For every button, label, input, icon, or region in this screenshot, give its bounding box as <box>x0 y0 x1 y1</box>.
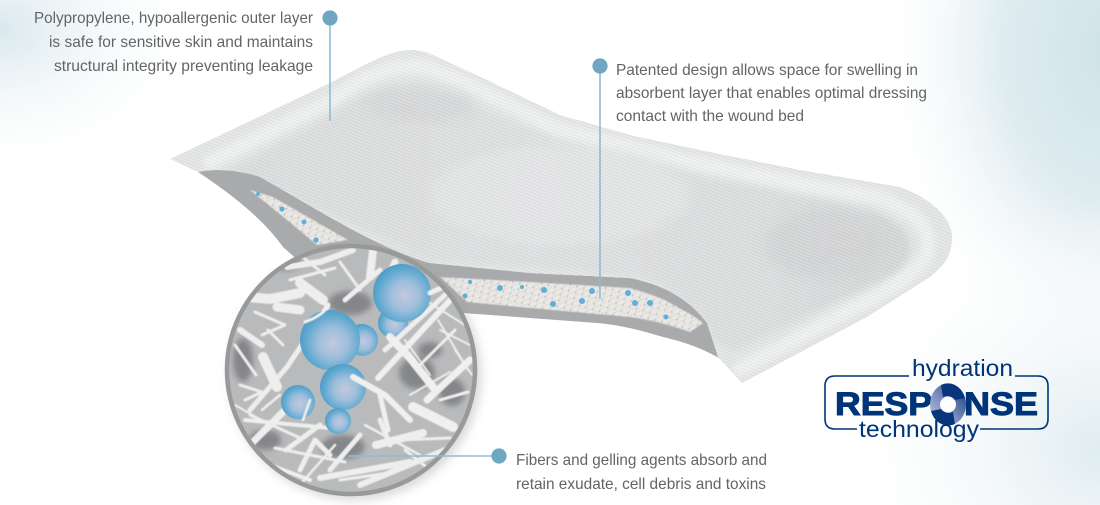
logo word: response <box>835 386 1038 422</box>
leader line <box>329 18 331 121</box>
logo word: response: RESP <box>835 386 932 422</box>
cross-section: absorbent foam right <box>440 277 703 332</box>
text block <box>516 452 767 493</box>
text block: structural integrity preventing leakage <box>54 58 313 75</box>
text block: retain exudate, cell debris and toxins <box>516 476 766 493</box>
logo word: technology: technology <box>859 416 980 442</box>
blue gel spheres, front <box>281 264 431 434</box>
dark gaps between fibers <box>233 254 465 459</box>
foreground fibers <box>303 288 470 430</box>
logo disc <box>930 383 966 426</box>
text block: is safe for sensitive skin and maintains <box>49 34 313 51</box>
white fibers <box>235 250 472 485</box>
logo: hydration response technology <box>825 355 1048 442</box>
text block: Patented design allows space for swelling in <box>616 62 918 79</box>
text block <box>616 62 927 125</box>
leader line <box>348 455 499 457</box>
text block: absorbent layer that enables optimal dressing <box>616 85 927 102</box>
marker dot <box>592 58 608 74</box>
text block: Fibers and gelling agents absorb and <box>516 452 767 469</box>
cross-section: absorbent foam left <box>250 190 348 245</box>
outer layer sheet <box>160 40 960 390</box>
logo word: hydration: hydration <box>912 355 1013 381</box>
callout: patented design <box>592 58 927 299</box>
cross-section: grey layers <box>198 170 719 358</box>
marker dot <box>322 10 338 26</box>
dressing illustration <box>160 40 960 390</box>
blue gel spheres, rear <box>356 314 408 356</box>
text block: Polypropylene, hypoallergenic outer layer <box>34 10 314 27</box>
marker dot <box>491 448 507 464</box>
logo word: response: O <box>936 386 960 422</box>
magnified fibers circle <box>225 244 481 500</box>
leader line <box>599 66 601 299</box>
text block: contact with the wound bed <box>616 108 804 125</box>
callout: fibers and gelling agents <box>348 448 767 493</box>
logo word: response: NSE <box>964 386 1038 422</box>
logo frame <box>825 376 1048 429</box>
callout: outer layer <box>34 10 338 121</box>
text block <box>34 10 314 75</box>
